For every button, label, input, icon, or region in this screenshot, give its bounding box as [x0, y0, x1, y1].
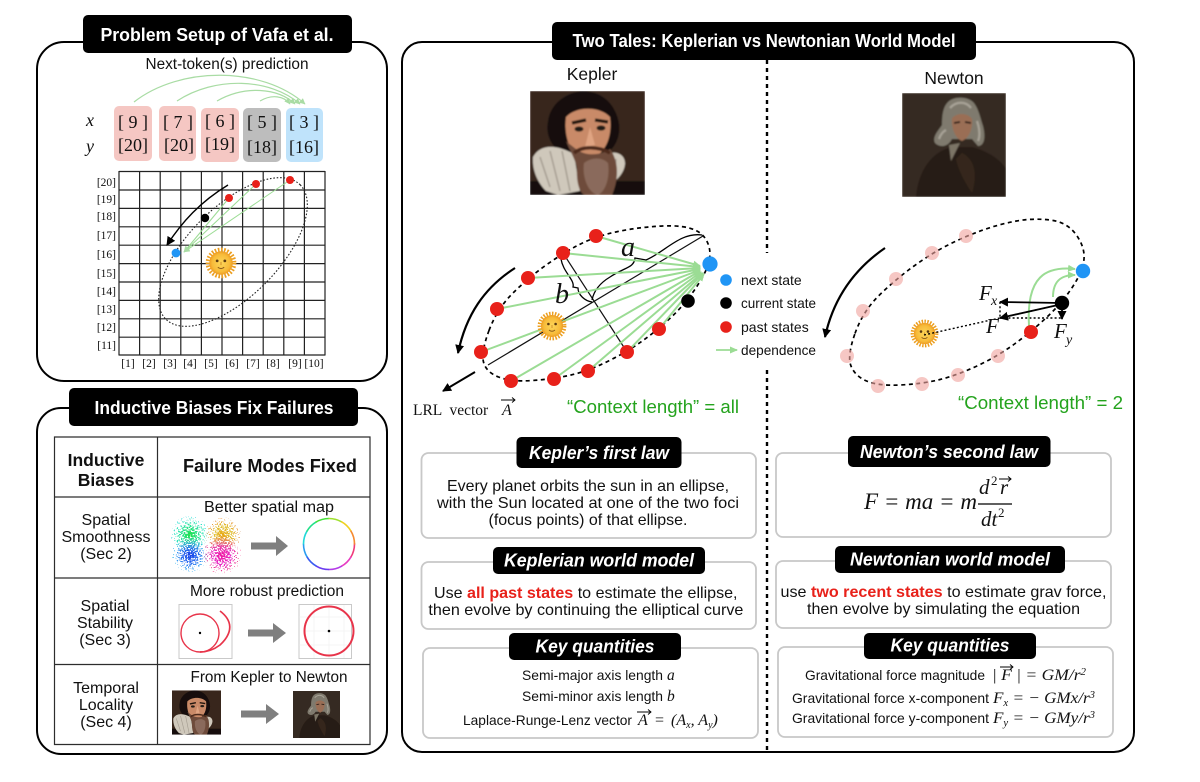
label: F: F: [985, 314, 999, 338]
arrow: scatter to ring: [251, 536, 288, 556]
row label: temporal locality: (Sec 4): [80, 714, 132, 731]
chart: grid with orbit: [12]: [97, 322, 116, 334]
chart: grid with orbit: [17]: [97, 230, 116, 242]
quantity: force x: GMx/r: [1044, 690, 1087, 707]
formula: 2: [998, 505, 1004, 520]
arrows: next-token dependence arcs: [134, 75, 305, 104]
card title: [509, 633, 681, 660]
legend: dependence: [741, 342, 816, 358]
formula: dt: [981, 507, 998, 531]
token table: x and y sequences: [20]: [164, 135, 194, 155]
arrow: force: [1000, 305, 1058, 318]
chart: stable orbit plot: [299, 604, 354, 658]
legend: [716, 272, 816, 358]
card: key quantities newton: [778, 633, 1113, 737]
quantity: force x: Gravitational force x-component: [792, 690, 989, 706]
label: Fy: [1053, 319, 1073, 348]
formula: d: [979, 475, 990, 499]
dotted force construction: [924, 302, 1062, 335]
chart: grid with orbit: [10]: [304, 358, 324, 370]
chart: grid with orbit: [16]: [97, 249, 116, 261]
token table: x and y sequences: [ 9 ]: [118, 112, 148, 132]
label: next-token prediction: Next-token(s) prediction: [146, 56, 308, 73]
axes: major and minor: [488, 236, 703, 365]
card title: Key quantities: [536, 636, 654, 656]
arrow: orbit direction: [825, 248, 885, 337]
label: context length 2: “Context length” = 2: [958, 392, 1123, 413]
label: context length all: “Context length” = all: [567, 396, 739, 417]
table frame: [54, 437, 370, 744]
card title: Keplerian world model: [504, 550, 695, 570]
card text: (focus points) of that ellipse.: [488, 512, 688, 529]
quantity: force y: GMy/r: [1044, 710, 1087, 727]
label: kepler: Kepler: [567, 64, 617, 84]
quantity: force x: [792, 690, 1095, 709]
label: a: a: [621, 232, 635, 263]
row label: temporal locality: Locality: [79, 697, 133, 714]
label: lrl vector: A: [501, 402, 512, 419]
black current state: [1055, 296, 1069, 310]
quantity: force magnitude: | F | = GM/r: [992, 667, 1077, 684]
quantity: force magnitude: [805, 664, 1086, 684]
faded past states: [840, 229, 1005, 393]
divider: dashed center line: [766, 60, 768, 752]
row caption: from kepler to newton: From Kepler to Newton: [190, 669, 348, 686]
row label: spatial smoothness: [62, 512, 150, 563]
card text: [428, 585, 744, 619]
arrows: green dependence: [1029, 269, 1075, 326]
panel: problem setup of Vafa et al.: [37, 15, 387, 381]
quantity: force x: F: [993, 690, 1003, 707]
chart: noisy colored scatter: [165, 512, 245, 577]
portrait: newton: [902, 93, 1006, 197]
table header: inductive biases: [68, 450, 145, 490]
quantity: semi-minor: Semi-minor axis length: [522, 688, 663, 704]
portrait: kepler: [530, 91, 645, 195]
chart: color ring: [304, 518, 354, 570]
card text: [436, 478, 739, 529]
card: key quantities kepler: [423, 633, 758, 738]
chart: grid with orbit: [13]: [97, 304, 116, 316]
label: Fx: x: [990, 294, 998, 309]
diagram: newtonian orbit: [825, 219, 1123, 413]
token table: x and y sequences: [ 3 ]: [289, 112, 319, 132]
card: newton's second law: [776, 436, 1111, 537]
arrow: force y: [1061, 305, 1063, 319]
label: newton: Newton: [924, 68, 984, 88]
label: Fy: y: [1064, 333, 1073, 348]
chart: grid with orbit: [8]: [266, 358, 280, 370]
row label: spatial stability: Spatial: [81, 598, 129, 615]
chart: grid with orbit: [3]: [163, 358, 177, 370]
annotation: brace a: [592, 235, 702, 300]
label: Fy: F: [1053, 319, 1067, 343]
formula: r: [1000, 475, 1009, 499]
quantity: force x: x: [1002, 698, 1009, 709]
label: Fx: [978, 281, 998, 309]
icon: sun: [913, 322, 936, 345]
heading: problem setup: [83, 15, 352, 53]
quantity: force x: 3: [1089, 690, 1095, 701]
card text: Every planet orbits the sun in an ellipse,: [447, 478, 729, 495]
card text: [780, 584, 1106, 618]
quantity: force magnitude: 2: [1081, 667, 1086, 678]
card title: Key quantities: [890, 634, 1010, 656]
chart: grid with orbit: [2]: [142, 358, 156, 370]
arrow: unstable to stable: [248, 623, 286, 643]
card: kepler's first law: [422, 437, 756, 538]
quantity: lrl vector: y: [707, 720, 713, 731]
portrait: kepler small: [172, 690, 221, 735]
quantity: force y: = −: [1008, 710, 1044, 727]
diagram: keplerian orbit: [413, 226, 739, 419]
row label: spatial stability: (Sec 3): [79, 632, 131, 649]
token table: x and y sequences: [16]: [289, 137, 319, 157]
quantity: lrl vector: =: [655, 712, 664, 729]
chart: unstable orbit plot: [179, 604, 232, 658]
arrow: kepler to newton: [241, 704, 279, 724]
row caption: better spatial map: Better spatial map: [204, 499, 334, 516]
chart: grid with orbit: [4]: [183, 358, 197, 370]
row label: temporal locality: [73, 680, 139, 731]
formula: [863, 473, 1012, 531]
quantity: lrl vector: (A: [671, 712, 686, 729]
current state dot: [681, 294, 695, 308]
quantity: semi-minor: b: [667, 688, 675, 705]
chart: grid with orbit: [19]: [97, 194, 116, 206]
label: lrl vector: [413, 398, 515, 419]
table header: failure modes fixed: Failure Modes Fixed: [183, 456, 357, 476]
panel: two tales keplerian vs newtonian: [402, 22, 1134, 752]
chart: grid with orbit: [5]: [204, 358, 218, 370]
label: Fx: F: [978, 281, 992, 305]
panel: inductive biases fix failures: [37, 388, 387, 754]
table header: inductive biases: Biases: [78, 470, 134, 490]
card text: then evolve by continuing the elliptical curve: [428, 602, 744, 619]
icon: sun: [540, 314, 564, 338]
card title: [864, 633, 1036, 659]
card text: Use all past states to estimate the ellipse,: [434, 585, 738, 602]
chart: grid with orbit: [11]: [97, 340, 116, 352]
chart: grid with orbit: [15]: [97, 268, 116, 280]
chart: grid with orbit: [9]: [288, 358, 302, 370]
quantity: force magnitude: Gravitational force magnitude: [805, 667, 985, 683]
red past state: [1024, 325, 1038, 339]
token table: x and y sequences: y: [84, 136, 94, 156]
row label: spatial smoothness: Smoothness: [62, 529, 150, 546]
token table: x and y sequences: [18]: [247, 137, 277, 157]
next state dot: [702, 256, 718, 272]
quantity: force y: F: [993, 710, 1003, 727]
card title: [516, 437, 682, 468]
token table: x and y sequences: [20]: [118, 135, 148, 155]
arrow: orbit direction: [458, 268, 515, 353]
row label: spatial smoothness: (Sec 2): [80, 546, 132, 563]
chart: grid with orbit: [6]: [225, 358, 239, 370]
row caption: more robust prediction: More robust prediction: [190, 583, 344, 600]
row label: spatial stability: [77, 598, 133, 649]
label: b: b: [555, 279, 569, 310]
card title: Kepler’s first law: [529, 442, 671, 463]
quantity: lrl vector: A: [698, 712, 708, 729]
card: keplerian world model: [422, 547, 756, 629]
chart: grid with orbit: [18]: [97, 211, 116, 223]
chart: grid with orbit: [7]: [246, 358, 260, 370]
table header: inductive biases: Inductive: [68, 450, 145, 470]
quantity: lrl vector: ,: [691, 712, 698, 729]
quantity: force x: = −: [1008, 690, 1044, 707]
row label: spatial smoothness: Spatial: [82, 512, 130, 529]
token table: x and y sequences: [ 5 ]: [247, 112, 277, 132]
label: lrl vector: LRL vector: [413, 402, 492, 419]
legend: current state: [741, 295, 816, 311]
token table: x and y sequences: [ 7 ]: [163, 112, 193, 132]
formula: 2: [991, 473, 998, 488]
heading: inductive biases: [69, 388, 358, 426]
heading: two tales: Two Tales: Keplerian vs Newtonian World Model: [572, 31, 956, 51]
card title: Newtonian world model: [850, 548, 1051, 570]
blue next state: [1076, 264, 1090, 278]
heading: problem setup: Problem Setup of Vafa et al.: [100, 25, 334, 45]
card text: use two recent states to estimate grav force,: [780, 584, 1106, 601]
portrait: newton small: [293, 691, 340, 738]
quantity: force y: 3: [1089, 710, 1095, 721]
arrow: lrl direction: [443, 372, 475, 391]
card: newtonian world model: [776, 546, 1111, 628]
annotation: brace b: [561, 259, 592, 302]
token table: x and y sequences: [84, 106, 323, 162]
legend: next state: [741, 272, 802, 288]
row label: temporal locality: Temporal: [73, 680, 139, 697]
card title: [848, 436, 1050, 467]
chart: grid with orbit: [14]: [97, 286, 116, 298]
chart: grid with orbit: [97, 153, 332, 370]
arrow: force x: [1000, 302, 1062, 303]
card title: Newton’s second law: [860, 441, 1040, 462]
token table: x and y sequences: x: [85, 110, 94, 130]
quantity: force y: Gravitational force y-component: [792, 710, 989, 726]
quantity: semi-major: a: [667, 667, 675, 684]
quantity: lrl vector: x: [685, 720, 691, 731]
card text: with the Sun located at one of the two foci: [436, 495, 739, 512]
quantity: lrl vector: A: [637, 712, 648, 729]
quantity: force y: y: [1002, 718, 1009, 729]
quantity: lrl vector: [463, 710, 718, 731]
legend: past states: [741, 319, 809, 335]
card text: then evolve by simulating the equation: [807, 601, 1080, 618]
quantity: force y: [792, 710, 1095, 729]
heading: two tales: [552, 22, 976, 60]
quantity: lrl vector: Laplace-Runge-Lenz vector: [463, 712, 632, 728]
formula: F = ma = m: [863, 489, 977, 514]
heading: inductive biases: Inductive Biases Fix Failures: [94, 398, 334, 418]
chart: grid with orbit: [1]: [121, 358, 135, 370]
arrows: green dependence: [481, 236, 704, 381]
token table: x and y sequences: [ 6 ]: [205, 111, 235, 131]
quantity: lrl vector: ): [712, 712, 718, 729]
past state dots: [474, 229, 666, 388]
chart: grid with orbit: [20]: [97, 177, 116, 189]
token table: x and y sequences: [19]: [205, 134, 235, 154]
quantity: semi-major: Semi-major axis length: [522, 667, 663, 683]
row label: spatial stability: Stability: [77, 615, 133, 632]
